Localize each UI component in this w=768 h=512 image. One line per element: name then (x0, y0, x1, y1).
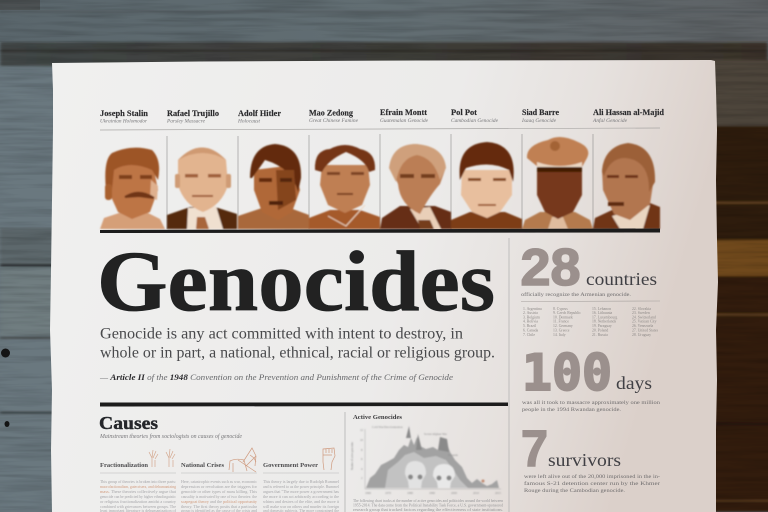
names: Pol Pot: Pol Pot (451, 108, 477, 117)
big number 28: 28 (520, 239, 580, 297)
country list: 25. Vatican City (632, 320, 657, 324)
panel: causes (99, 413, 340, 512)
panel: active genocides (350, 414, 503, 512)
portrait: Stalin (100, 148, 165, 229)
area chart with skulls: Soviet Afghan War (424, 432, 447, 436)
subheading: government power: Government Power (263, 463, 318, 469)
big number 7: 7 (521, 420, 548, 477)
body text columns: argues that "The more power a government has (263, 489, 339, 494)
right wood planks (712, 60, 768, 512)
dictators header row (100, 108, 665, 229)
names: Pol Pot: Cambodian Genocide (451, 119, 499, 124)
names: Joseph Stalin (100, 109, 149, 124)
names: Mao Zedong (309, 108, 359, 124)
icon: raised hands (149, 449, 175, 467)
country list: 18. Netherlands (592, 320, 617, 324)
panel: statistic 28 countries (520, 239, 660, 337)
names: Siad Barre: Isaaq Genocide (521, 119, 557, 124)
country list: 16. Lithuania (592, 311, 613, 315)
body text columns: will make war on others and murder its foreign (263, 504, 339, 509)
definition text: whole or in part, a national, ethnical, racial or religious group. (100, 344, 495, 362)
area chart with skulls: 12 (360, 428, 364, 432)
vertical divider causes chart (344, 412, 346, 512)
paper sheet (50, 60, 718, 512)
names: Joseph Stalin: Joseph Stalin (100, 109, 149, 118)
country list: 8. Cyprus (553, 307, 568, 311)
names: Ali Hassan al-Majid (592, 108, 665, 124)
area chart with skulls: 2010 (473, 491, 480, 495)
citation: — Article II of the 1948 Convention on the Prevention and Punishment of the Crime of Genocide (99, 372, 453, 382)
country list: 17. Luxembourg (592, 315, 617, 319)
area chart with skulls: Rwanda (448, 453, 458, 457)
knots (1, 348, 10, 427)
body text columns: depression or revolution are the triggers for (181, 484, 258, 489)
area chart with skulls: 2 (361, 476, 363, 480)
description (522, 400, 660, 413)
panel: statistic 7 survivors (521, 420, 660, 494)
portrait: Mao (309, 145, 380, 229)
heading: causes: Causes (99, 413, 158, 433)
country list: 1. Argentina (523, 307, 542, 311)
area chart with skulls: 6 (361, 457, 363, 461)
body text columns (100, 479, 340, 512)
country list: 6. Canada (523, 328, 538, 332)
panel: statistic 100 days (522, 344, 660, 413)
country list: 22. Slovakia (632, 307, 651, 311)
causes subtitle: Mainstream theories from sociologists on causes of genocide (99, 433, 242, 440)
country list: 27. United States (632, 328, 659, 332)
label survivors: survivors (548, 450, 621, 470)
skull left (405, 461, 426, 488)
country list: 24. Switzerland (632, 315, 656, 319)
chart caption (353, 498, 503, 512)
names: Ali Hassan al-Majid: Anfal Genocide (592, 119, 628, 124)
country list: 20. Poland (592, 328, 608, 332)
names: Joseph Stalin: Ukrainian Holomodor (100, 120, 147, 124)
chart caption: research group that tracked factors regarding the effectiveness of state institutions. (353, 507, 503, 512)
area chart with skulls: 10 (360, 438, 364, 442)
portrait: Majid (593, 143, 660, 229)
body text columns: causality is motivated by one of two theories: the (181, 494, 257, 499)
body text columns: genocide can be predicted by higher ethnolinguistic (100, 494, 176, 499)
big number 100: 100 (522, 344, 612, 402)
country list: 12. Germany (553, 324, 573, 328)
country list: 21. Russia (592, 333, 608, 337)
names: Ali Hassan al-Majid: Ali Hassan al-Majid (593, 108, 665, 117)
description: were left alive out of the 20,000 imprisoned in the in- (524, 473, 660, 480)
thick rule above causes (100, 402, 508, 406)
body text columns: scapegoat theory and the political opportunity (181, 499, 257, 504)
names: Efrain Montt (380, 108, 429, 124)
area chart with skulls: 8 (361, 448, 363, 452)
country list: 10. Denmark (553, 315, 573, 319)
country list (523, 307, 659, 337)
country list: 14. Italy (553, 333, 566, 337)
portraits row (100, 137, 660, 229)
names: Mao Zedong: Mao Zedong (309, 108, 353, 118)
description: Rouge during the Cambodian genocide. (524, 488, 626, 494)
country list: 4. Bolivia (523, 320, 538, 324)
names: Pol Pot (451, 108, 499, 124)
icon: horse and rider (229, 448, 256, 472)
description: was all it took to massacre approximately one million (522, 400, 660, 406)
area chart with skulls: 1990 (429, 491, 436, 495)
description: famous S-21 detention center run by the Khmer (524, 480, 660, 487)
country list: 3. Belgium (523, 315, 540, 319)
names: Adolf Hitler: Adolf Hitler (238, 109, 281, 118)
body text columns: theory. The first theory posits that a particular (181, 504, 258, 509)
names: Rafael Trujillo (166, 109, 219, 124)
names: Adolf Hitler: Holocaust (237, 120, 261, 124)
country list: 5. Brazil (523, 324, 536, 328)
area chart with skulls: 1980 (407, 491, 414, 495)
names: Efrain Montt: Efrain Montt (380, 108, 427, 117)
thick rule under portraits (100, 228, 660, 233)
description: officially recognize the Armenian genocide. (521, 291, 632, 298)
body text columns: macrofactionalism, gatecrisers, and dehumanizing (100, 484, 176, 490)
country list: 11. France (553, 320, 569, 324)
chart caption: 1955-2014. The data come from the Political Instability Task Force, a U.S. government-sponsored (353, 502, 503, 508)
names: Adolf Hitler (237, 109, 281, 124)
names: Mao Zedong: Great Chinese Famine (309, 119, 359, 124)
country list: 9. Czech Republic (553, 311, 581, 315)
definition text: Genocide is any act committed with intent to destroy, in (100, 326, 463, 342)
label days: days (616, 373, 652, 393)
portrait: Barre (522, 137, 593, 229)
country list: 28. Uruguay (632, 333, 651, 337)
subheading: fractionalization: Fractionalization (100, 463, 149, 469)
body text columns: the more it can act arbitrarily according to the (263, 494, 339, 499)
country list: 26. Venezuela (632, 324, 654, 328)
country list: 13. Greece (553, 328, 570, 332)
body text columns: genocide or other types of mass killing. This (181, 489, 257, 494)
country list: 15. Lebanon (592, 307, 611, 311)
portrait: Trujillo (167, 148, 237, 229)
area chart with skulls: Number of active genocides (350, 442, 354, 470)
area chart with skulls: 1970 (385, 491, 392, 495)
portrait: Pol Pot (451, 142, 522, 229)
area chart with skulls: 1960 (365, 491, 372, 495)
names: Rafael Trujillo: Rafael Trujillo (167, 109, 219, 118)
description (524, 473, 660, 494)
country list: 23. Sweden (632, 311, 650, 315)
description: people in the 1994 Rwandan genocide. (522, 407, 622, 413)
names: Siad Barre: Siad Barre (522, 108, 559, 117)
names: Rafael Trujillo: Parsley Massacre (166, 120, 206, 124)
body text columns: combined with grievances between groups. The (100, 504, 176, 509)
subheading: national crises: National Crises (181, 463, 225, 469)
names: Efrain Montt: Guatemalan Genocide (380, 119, 429, 124)
country list: 7. Chile (523, 333, 535, 337)
area chart with skulls: 2000 (451, 491, 458, 495)
names: Siad Barre (521, 108, 559, 124)
icon: raised fist (323, 448, 335, 470)
skull right (433, 464, 455, 488)
body text columns: and is referred to as the power principle. Rummel (263, 484, 340, 489)
country list: 19. Paraguay (592, 324, 612, 328)
body text columns: mass. These theories collectively argue that (100, 489, 177, 494)
title: Genocides (97, 233, 495, 329)
label countries: countries (586, 269, 657, 289)
area chart with skulls: 2015 (495, 491, 502, 495)
body text columns: whims and desires of the elite, and the more it (263, 499, 340, 505)
body text columns: This theory is largely due to Rudolph Rummel (263, 479, 340, 484)
area chart with skulls: Cold War/Decolonization (372, 425, 403, 429)
country list: 2. Austria (523, 311, 538, 315)
portrait: Hitler (238, 144, 309, 229)
area chart with skulls (350, 425, 502, 495)
definition text (100, 326, 495, 362)
area chart with skulls: 4 (361, 467, 363, 471)
portrait: Montt (380, 144, 451, 229)
body text columns: Here, catastrophic events such as war, economic (181, 479, 257, 485)
chart caption: The following chart tracks at the number of active genocides and politicides around the world between (353, 498, 503, 503)
body text columns: or religious fractionalization amidst a country (100, 499, 176, 504)
heading: active genocides: Active Genocides (353, 414, 402, 421)
vertical column divider (508, 238, 510, 512)
body text columns: This group of theories is broken into three parts: (100, 479, 176, 484)
